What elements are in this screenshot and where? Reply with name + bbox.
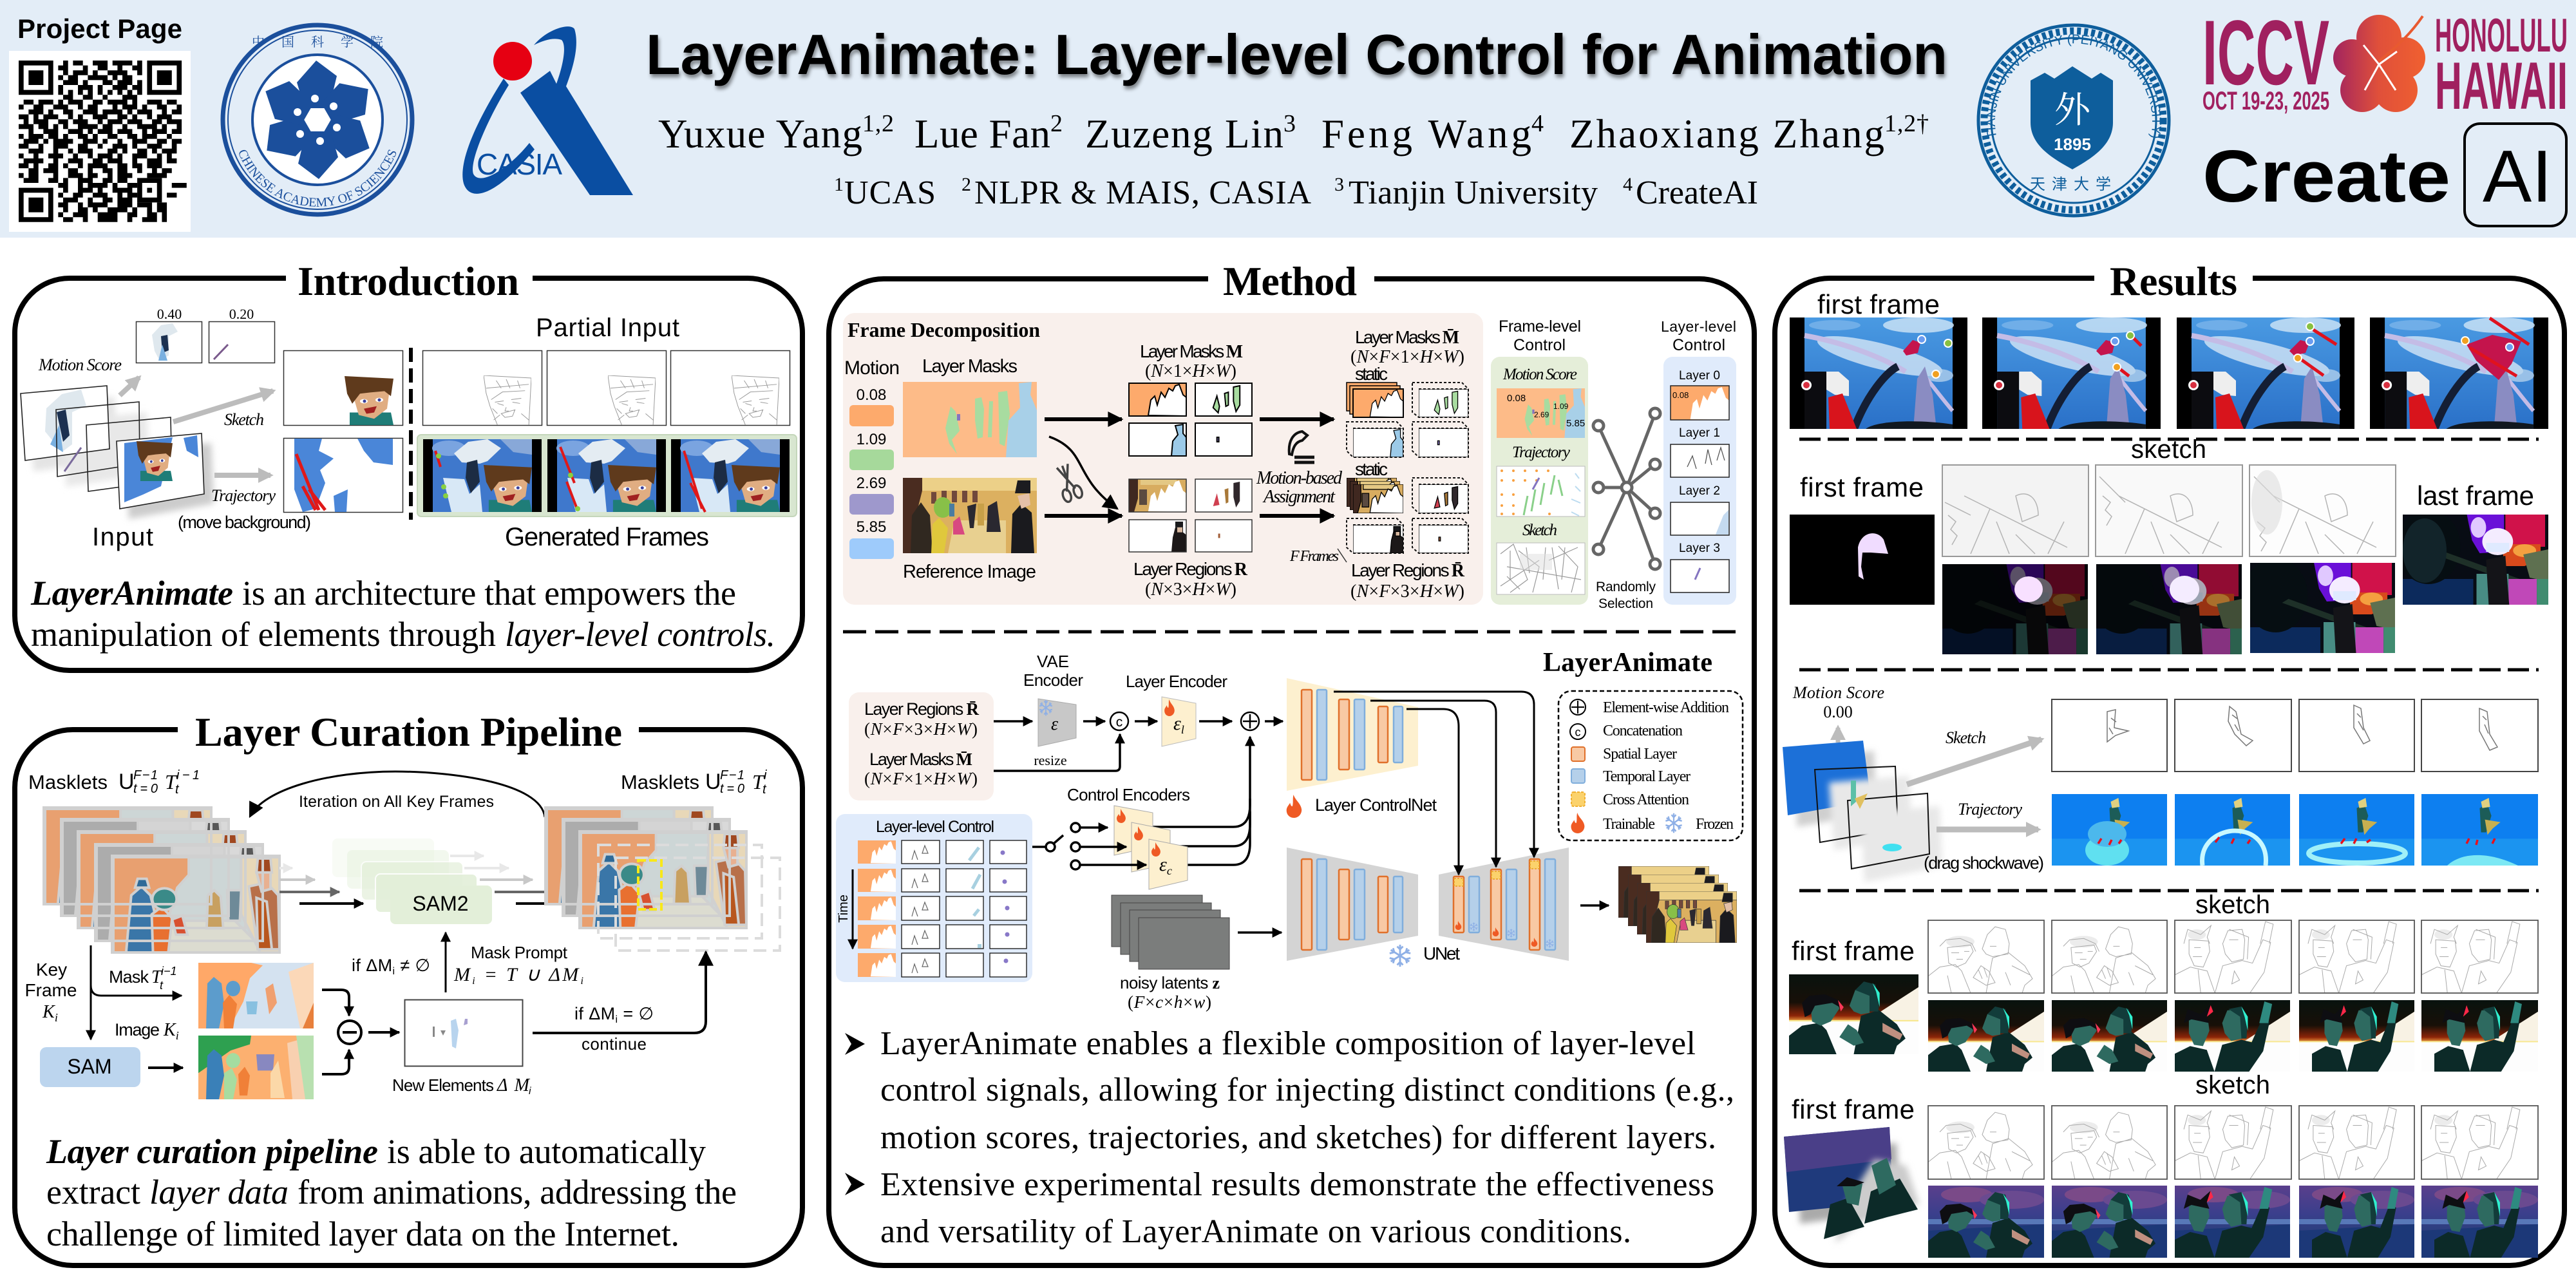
authors: Feng Wang — [1321, 111, 1531, 156]
motion score label: Motion Score — [38, 355, 122, 374]
legend: Concatenation — [1603, 723, 1683, 739]
logo: Tianjin University: 1895 — [2054, 135, 2091, 154]
legend: Cross Attention — [1603, 791, 1689, 808]
masklets output label: t — [762, 782, 767, 797]
masklets input label: t=0 — [133, 782, 158, 796]
unet — [1287, 848, 1569, 967]
sketch interpolation: sketches — [1942, 465, 2396, 556]
motion score control: 1.09 — [1553, 402, 1569, 411]
new elements caption — [392, 1075, 531, 1097]
layer regions R-bar group: static — [1355, 459, 1388, 479]
logo: Create AI — [2202, 124, 2566, 226]
noisy latents: (F×c×h×w) — [1128, 992, 1211, 1012]
panel: method — [829, 258, 1754, 1265]
couple row 1: first frame — [1789, 936, 1918, 1054]
masklets input label — [28, 768, 200, 797]
partial input: trajectory layer — [283, 438, 403, 513]
layer encoder: ε — [1173, 713, 1181, 734]
layer regions R group: (N×3×H×W) — [1145, 580, 1236, 600]
sketch interpolation: generated frames — [1936, 558, 2395, 654]
shockwave frames — [2052, 794, 2538, 866]
pipeline paragraph: is able to automatically — [387, 1132, 706, 1171]
intro paragraph — [30, 574, 775, 654]
new elements dashed frames — [598, 845, 780, 951]
masklets input label: U — [118, 770, 135, 794]
layer-level control panel: 0.08 — [1672, 390, 1689, 400]
masklets output label — [621, 768, 767, 797]
legend — [1558, 691, 1743, 840]
authors: Zhaoxiang Zhang — [1569, 111, 1884, 156]
continue arrow — [533, 952, 706, 1033]
couple row 2: sketches — [1928, 1106, 2538, 1179]
affiliations: CreateAI — [1636, 175, 1758, 211]
image label — [115, 1020, 179, 1042]
subtraction operator — [338, 1021, 361, 1044]
affiliations: 2 — [961, 174, 971, 195]
layer-level control grid — [836, 814, 1032, 982]
authors: Lue Fan — [914, 111, 1050, 156]
dashed separator — [843, 630, 1742, 634]
motion score control: 5.85 — [1566, 418, 1585, 429]
motion score thumbnails: 0.20 — [229, 306, 254, 322]
control encoders — [1067, 785, 1190, 889]
intro paragraph: layer-level controls. — [505, 615, 775, 654]
method bullet 1: control signals, allowing for injecting distinct conditions (e.g., — [880, 1072, 1734, 1108]
trajectory control — [1497, 444, 1585, 516]
logo: ICCV Honolulu Hawaii: OCT 19-23, 2025 — [2202, 87, 2329, 115]
mask prompt formula: M — [454, 964, 470, 985]
VAE encoder — [1023, 652, 1083, 746]
mask segmentation image — [198, 963, 314, 1028]
affiliations: Tianjin University — [1349, 175, 1598, 211]
layer masks image — [903, 356, 1037, 457]
dashed separator — [1799, 889, 2539, 893]
authors: Zuzeng Lin — [1085, 111, 1283, 156]
iteration label: Iteration on All Key Frames — [299, 793, 494, 811]
logo: Tianjin University: TIANJIN UNIVERSITY (PEIYANG UNIVERSITY) — [1986, 34, 2161, 139]
icon: scissors — [1053, 462, 1084, 503]
motion score and shockwave: input stack: 0.00 — [1823, 703, 1853, 721]
mask prompt formula: i — [472, 976, 475, 987]
header banner — [0, 0, 2576, 238]
VAE encoder: Encoder — [1023, 670, 1083, 690]
method bullet 2 — [845, 1166, 1714, 1250]
layer masks image: Layer Masks — [922, 356, 1018, 377]
sketch interpolation: first frame — [1790, 472, 1935, 605]
mask label: T — [151, 967, 163, 987]
pipeline paragraph: extract — [46, 1173, 140, 1211]
SAM2 ghost stack — [332, 838, 477, 913]
pipeline paragraph: challenge of limited layer data on the Internet. — [46, 1215, 679, 1253]
concat operator: c — [1116, 715, 1122, 730]
layer-level control panel: Layer 1 — [1679, 426, 1720, 440]
empty condition: if ΔM — [574, 1004, 615, 1023]
sketch interpolation: sketch label: sketch — [2131, 435, 2206, 464]
SAM2 box: SAM2 — [412, 892, 469, 915]
dashed separator — [1799, 438, 2539, 440]
mask label: i−1 — [161, 965, 177, 978]
intro paragraph: manipulation of elements through — [31, 615, 496, 654]
motion score control: 0.08 — [1507, 393, 1526, 404]
pipeline paragraph — [46, 1132, 737, 1253]
sketch interpolation: first frame: first frame — [1800, 472, 1924, 502]
mask label: Mask — [109, 967, 149, 987]
authors — [658, 110, 1929, 156]
concat operator — [1110, 712, 1128, 730]
latent arrow — [1238, 931, 1282, 934]
logo: Tianjin University: 天津大学 — [2030, 171, 2117, 194]
mask prompt arrow — [444, 933, 447, 992]
random selection network: Randomly — [1596, 580, 1656, 594]
mask label: t — [160, 979, 164, 992]
image label: K — [164, 1020, 176, 1040]
addition operator — [1241, 712, 1259, 730]
masklets input label: T — [165, 770, 178, 793]
resize label: resize — [1034, 752, 1067, 768]
masklets output label: T — [752, 770, 765, 793]
authors: 3 — [1283, 110, 1296, 137]
motion legend: Motion — [844, 357, 900, 379]
layer masks M group — [1129, 341, 1252, 456]
layer masks M-bar group: static — [1355, 364, 1388, 384]
generated frames — [417, 435, 797, 516]
panel: layer curation pipeline — [15, 709, 802, 1265]
SAM2 box — [390, 886, 492, 924]
authors: Yuxue Yang — [658, 111, 862, 156]
couple row 2: sketch label: sketch — [2195, 1071, 2270, 1099]
sketch interpolation: last frame: last frame — [2417, 480, 2534, 511]
icon: motion-based assignment — [1289, 431, 1314, 462]
logo: Create AI: AI — [2483, 136, 2552, 218]
image label: i — [176, 1029, 179, 1042]
not-empty condition: if ΔM — [352, 956, 392, 975]
generated frames caption: Generated Frames — [505, 523, 709, 551]
trajectory italic label: Trajectory — [1958, 800, 2022, 819]
mask label — [109, 965, 177, 992]
frame decomposition heading: Frame Decomposition — [848, 318, 1040, 341]
layer regions R-bar group: (N×F×3×H×W) — [1350, 582, 1464, 601]
continue label: continue — [582, 1034, 647, 1054]
noisy latents: noisy latents z — [1120, 973, 1220, 992]
authors: 4 — [1531, 110, 1544, 137]
motion score and shockwave: input stack — [1783, 683, 1942, 882]
affiliations: UCAS — [844, 175, 936, 211]
pipeline paragraph: from animations, addressing the — [298, 1173, 737, 1211]
output arrow — [1580, 904, 1609, 907]
motion legend: 1.09 — [857, 431, 886, 448]
new elements caption: ΔM — [497, 1075, 531, 1095]
motion score control: 2.69 — [1534, 410, 1549, 419]
masklets input label: Masklets — [28, 771, 108, 793]
pipeline paragraph: Layer curation pipeline — [46, 1132, 378, 1171]
controlnet to unet arrows — [1334, 692, 1534, 875]
frame-level control panel: Control — [1513, 336, 1566, 354]
masklets output label: Masklets — [621, 771, 699, 793]
couple row 2: first frame collage — [1784, 1094, 1919, 1243]
couple row 1: sketches — [1928, 920, 2538, 993]
partial input sketches — [422, 350, 790, 425]
random selection network — [1593, 408, 1660, 611]
SAM box — [40, 1047, 140, 1087]
SAM box: SAM — [67, 1055, 112, 1078]
motion score control: Motion Score — [1502, 366, 1577, 383]
decomposition arrows — [1045, 419, 1122, 516]
inputs box: layer regions and masks: (N×F×1×H×W) — [864, 769, 978, 788]
inputs box: layer regions and masks: Layer Regions R̄ — [864, 699, 979, 719]
layeranimate label: LayerAnimate — [1543, 648, 1712, 677]
output frames — [1618, 866, 1737, 943]
layer encoder: Layer Encoder — [1126, 672, 1227, 691]
QR code — [9, 51, 191, 232]
pipeline paragraph: layer data — [149, 1173, 289, 1211]
empty condition: = ∅ — [618, 1004, 654, 1023]
title: LayerAnimate: Layer-level Control for Animation — [646, 23, 1947, 86]
subtraction arrows — [322, 990, 399, 1074]
layer encoder — [1126, 672, 1227, 746]
control encoders: ε — [1159, 854, 1167, 875]
authors: 1,2† — [1884, 110, 1929, 137]
legend: Frozen — [1696, 816, 1734, 833]
affiliations: 3 — [1334, 174, 1344, 195]
logo: Chinese Academy of Sciences — [220, 23, 415, 216]
inputs box: layer regions and masks: Layer Masks M̄ — [869, 750, 972, 769]
legend: Trainable — [1603, 816, 1655, 833]
masklets output label: U — [705, 770, 721, 794]
motion score thumbnails: 0.40 — [157, 306, 182, 322]
F frames note: F Frames — [1289, 548, 1339, 565]
motion-based assignment label: Assignment — [1262, 487, 1336, 507]
frame-level control panel — [1491, 317, 1588, 605]
panel: introduction — [15, 258, 802, 670]
control encoders: c — [1167, 864, 1172, 877]
output frames stack — [545, 808, 746, 928]
motion score thumbnails — [137, 306, 274, 363]
masklets output label: t=0 — [720, 782, 744, 796]
layer-level control grid: Time — [837, 895, 851, 923]
VAE encoder: ε — [1051, 714, 1058, 734]
trajectory result frames — [1790, 317, 2548, 429]
iteration curved arrow — [250, 772, 545, 817]
switch and control inputs — [1032, 823, 1146, 869]
grey arrows from input — [120, 377, 273, 475]
layer regions R-bar group: Layer Regions R̄ — [1351, 560, 1465, 581]
VAE encoder: VAE — [1037, 652, 1069, 671]
layer masks M-bar group — [1347, 327, 1468, 457]
authors: 1,2 — [862, 110, 894, 137]
logo: Create AI: Create — [2202, 136, 2450, 218]
logo: CASIA: CASIA — [477, 147, 562, 181]
key frame label: Frame — [25, 980, 77, 1000]
heading: introduction: Introduction — [298, 258, 519, 304]
layer regions R group: Layer Regions R — [1133, 559, 1248, 580]
logo: Tianjin University — [1977, 23, 2170, 218]
sketch label: Sketch — [224, 410, 264, 429]
method bullet 1 — [845, 1025, 1734, 1156]
input frames stack — [44, 808, 279, 952]
affiliations: 4 — [1623, 174, 1633, 195]
trajectory label: Trajectory — [211, 486, 276, 505]
motion-based assignment label — [1256, 468, 1343, 507]
move background caption: (move background) — [178, 513, 311, 532]
legend: Temporal Layer — [1603, 768, 1690, 785]
new elements box — [404, 999, 523, 1066]
layer masks M-bar group: Layer Masks M̄ — [1355, 327, 1459, 348]
method bullet 2: and versatility of LayerAnimate on various conditions. — [880, 1213, 1631, 1250]
image label: Image — [115, 1020, 160, 1039]
masklets input label: i−1 — [176, 768, 200, 782]
layer-level control panel: Layer 3 — [1679, 542, 1720, 555]
frame-level control panel: Frame-level — [1499, 317, 1581, 336]
frame decomposition panel — [843, 313, 1483, 605]
couple row 2: first frame collage: first frame — [1792, 1094, 1915, 1124]
key frame label: Key — [36, 960, 67, 980]
SAM segmentation image — [198, 1036, 314, 1099]
couple row 1: sketch label: sketch — [2195, 891, 2270, 919]
sketch control: Sketch — [1522, 522, 1557, 539]
heading: layer curation pipeline: Layer Curation Pipeline — [195, 709, 622, 755]
layer encoder: l — [1181, 723, 1184, 736]
project page label: Project Page — [17, 14, 182, 44]
masklets output label: F−1 — [720, 768, 744, 782]
layer masks M group: Layer Masks M — [1140, 341, 1243, 362]
method bullet 2: Extensive experimental results demonstrate the effectiveness — [880, 1166, 1714, 1203]
dashed divider — [409, 348, 413, 520]
motion legend — [844, 357, 900, 559]
noisy latents — [1112, 895, 1229, 1012]
propagation arrows — [279, 856, 580, 904]
key frame label: K — [43, 1002, 55, 1022]
layer regions R group — [1129, 479, 1252, 600]
panel: results — [1775, 258, 2564, 1265]
random selection network: Selection — [1598, 596, 1653, 611]
method bullet 1: motion scores, trajectories, and sketches) for different layers. — [880, 1119, 1716, 1156]
mask prompt formula: = T ∪ ΔM — [477, 964, 580, 985]
input frame stack — [21, 386, 214, 519]
motion legend: 0.08 — [857, 386, 886, 404]
layer-level control panel: Layer 0 — [1679, 369, 1720, 383]
masklets output label: i — [764, 768, 767, 782]
affiliations: 1 — [834, 174, 844, 195]
new elements caption: i — [529, 1086, 531, 1097]
key frame arrows — [91, 945, 182, 1039]
control encoders: Control Encoders — [1067, 785, 1190, 804]
drag shockwave caption: (drag shockwave) — [1924, 853, 2044, 873]
couple row 2: generated frames — [1928, 1186, 2538, 1258]
partial input: face layer — [283, 350, 403, 425]
layer masks M-bar group: (N×F×1×H×W) — [1350, 347, 1464, 367]
motion score control — [1497, 366, 1585, 438]
new element highlight — [638, 860, 661, 909]
layer regions R-bar group — [1347, 459, 1468, 601]
logo: CASIA — [462, 26, 633, 195]
couple row 1: first frame: first frame — [1792, 936, 1915, 966]
not-empty condition: ≠ ∅ — [395, 956, 430, 975]
mask prompt formula: i — [581, 976, 583, 987]
empty condition: i — [616, 1014, 618, 1025]
layer masks M group: (N×1×H×W) — [1145, 361, 1236, 381]
motion legend: 2.69 — [857, 475, 886, 492]
inputs box: layer regions and masks: (N×F×3×H×W) — [864, 719, 978, 739]
logo: ICCV Honolulu Hawaii — [2202, 2, 2568, 124]
logo: Chinese Academy of Sciences: 中国科学院 — [252, 32, 400, 50]
logo: Tianjin University: 外 — [2054, 82, 2092, 133]
layer-level control panel: Layer 2 — [1679, 484, 1720, 498]
couple row 1: generated frames — [1928, 1000, 2538, 1072]
heading: method: Method — [1223, 258, 1357, 304]
intro paragraph: is an architecture that empowers the — [242, 574, 736, 612]
motion legend: 5.85 — [857, 518, 886, 536]
masklets input label: t — [175, 782, 180, 797]
intro paragraph: LayerAnimate — [30, 574, 233, 612]
masklets input label: F−1 — [133, 768, 158, 782]
affiliations — [834, 174, 1758, 211]
affiliations: NLPR & MAIS, CASIA — [974, 175, 1311, 211]
mask prompt label: Mask Prompt — [471, 943, 568, 962]
logo: ICCV Honolulu Hawaii: ICCV — [2202, 2, 2329, 104]
layer-level control panel — [1661, 318, 1736, 605]
legend: Element-wise Addition — [1603, 699, 1729, 716]
sketch control — [1497, 522, 1585, 594]
dashed separator — [1799, 668, 2539, 671]
reference image — [903, 478, 1037, 582]
SAM arrow — [148, 1066, 183, 1069]
key frame label — [25, 960, 77, 1024]
partial input caption: Partial Input — [536, 314, 679, 342]
sketch italic label: Sketch — [1946, 728, 1986, 747]
legend: c — [1575, 726, 1580, 739]
motion score and shockwave: input stack: Motion Score — [1792, 683, 1884, 702]
legend: Spatial Layer — [1603, 746, 1677, 762]
motion-based assignment label: Motion-based — [1256, 468, 1343, 488]
layer-level control grid: Layer-level Control — [876, 818, 994, 836]
logo: Chinese Academy of Sciences: CHINESE ACADEMY OF SCIENCES — [240, 149, 397, 207]
assignment arrows — [1260, 419, 1334, 516]
reference image: Reference Image — [903, 562, 1036, 582]
layer controlnet — [1287, 678, 1437, 818]
heading: results: Results — [2110, 258, 2237, 304]
layer controlnet: Layer ControlNet — [1315, 795, 1437, 815]
sketch interpolation: last frame — [2396, 480, 2548, 605]
key frame label: i — [55, 1011, 58, 1024]
unet: UNet — [1423, 943, 1460, 963]
inputs box: layer regions and masks — [849, 692, 994, 800]
shockwave sketches — [2052, 699, 2538, 772]
authors: 2 — [1050, 110, 1063, 137]
grey arrows — [1907, 739, 2041, 829]
trajectory control: Trajectory — [1512, 444, 1571, 461]
not-empty condition: i — [393, 966, 395, 977]
encoder flow arrows — [994, 721, 1283, 865]
layer-level control panel: Control — [1672, 336, 1725, 354]
new elements caption: New Elements — [392, 1075, 494, 1095]
input caption: Input — [92, 523, 153, 551]
trajectory result: first frame label: first frame — [1817, 289, 1940, 319]
method bullet 1: LayerAnimate enables a flexible composition of layer-level — [880, 1025, 1696, 1062]
layer-level control panel: Layer-level — [1661, 318, 1736, 335]
